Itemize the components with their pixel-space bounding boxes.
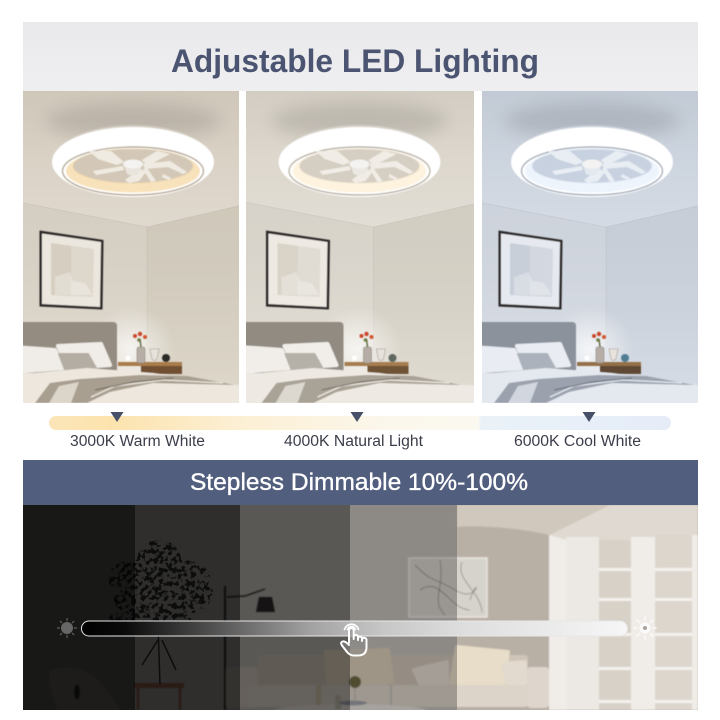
icon: pointing hand bbox=[341, 624, 366, 656]
dimming banner bbox=[23, 460, 698, 505]
title: Adjustable LED Lighting bbox=[171, 43, 539, 79]
coffee table bbox=[274, 704, 428, 710]
alcove right side bbox=[550, 505, 698, 540]
dimming heading: Stepless Dimmable 10%-100% bbox=[190, 469, 528, 496]
marker: 3000K bbox=[110, 412, 124, 422]
stool bbox=[134, 683, 184, 688]
floor lamp bbox=[224, 586, 226, 710]
title banner bbox=[23, 22, 698, 91]
photo: natural light bedroom with ceiling fan light bbox=[246, 91, 474, 403]
ceiling bbox=[457, 505, 610, 535]
icon: low brightness sun bbox=[58, 618, 76, 638]
marker: 6000K bbox=[582, 412, 596, 422]
label: 6000K Cool White: 6000K Cool White bbox=[514, 433, 641, 450]
tree bbox=[108, 540, 213, 684]
wall painting bbox=[409, 558, 487, 617]
photo: warm white bedroom with ceiling fan light bbox=[23, 91, 239, 403]
chair bbox=[50, 668, 120, 710]
marker: 4000K bbox=[350, 412, 364, 422]
photo: living room dimming from dark to bright bbox=[23, 505, 698, 720]
icon: high brightness sun bbox=[634, 617, 656, 639]
label: 4000K Natural Light: 4000K Natural Light bbox=[284, 433, 424, 450]
brightness step overlays bbox=[23, 505, 457, 710]
label: 3000K Warm White: 3000K Warm White bbox=[70, 433, 205, 450]
color temperature bar bbox=[49, 412, 671, 430]
brightness slider bbox=[58, 617, 656, 656]
photo: cool white bedroom with ceiling fan light bbox=[482, 91, 698, 403]
sofa bbox=[392, 655, 528, 683]
